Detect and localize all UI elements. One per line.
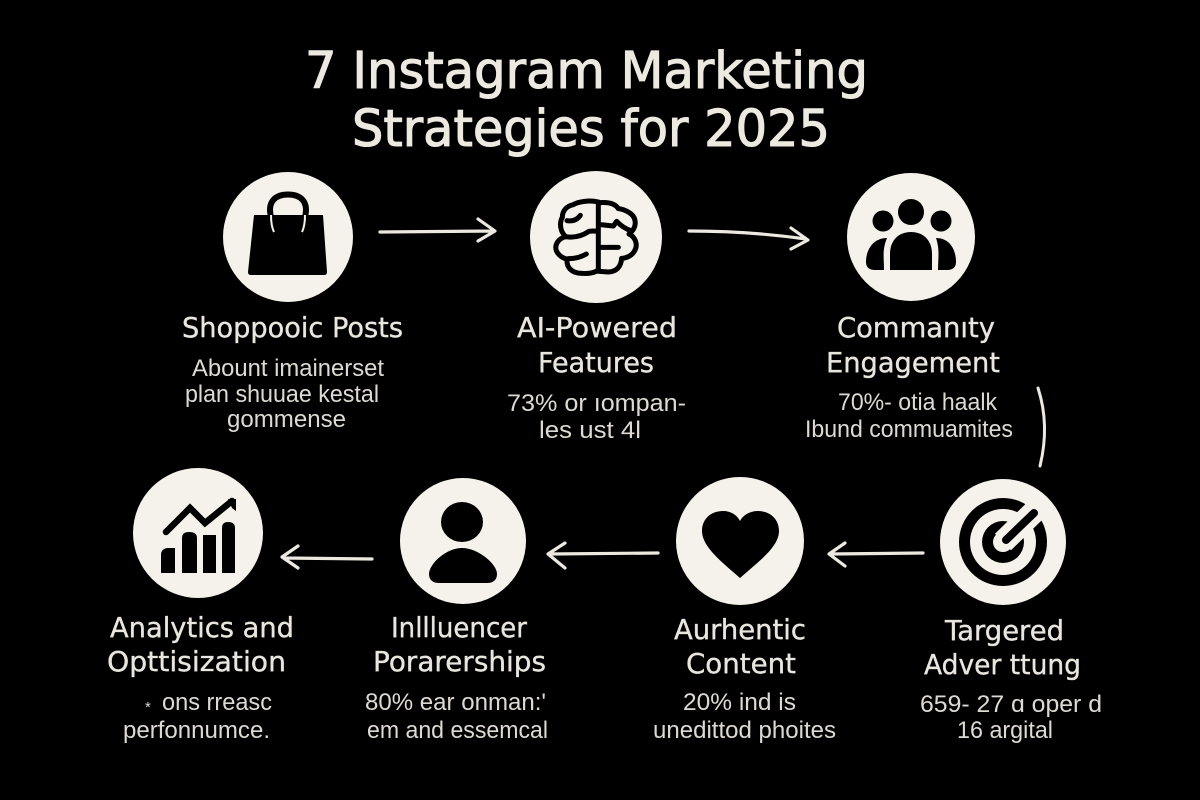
panel: community engagement [805, 173, 1013, 443]
heading: influencer partnerships: Porarerships [373, 645, 546, 678]
arrow: AI to community [689, 228, 808, 249]
description: community engagement [805, 389, 1013, 443]
description: influencer partnerships [365, 689, 548, 744]
heading: influencer partnerships [373, 611, 546, 678]
description: influencer partnerships: 80% ear onman:' [365, 689, 546, 716]
icon: bar chart with trend line [133, 468, 263, 598]
heading: influencer partnerships: Inllluencer [391, 611, 527, 644]
heading: analytics and optimization: Analytics and [110, 611, 294, 644]
description: AI-powered features: 73% or ıompan- [507, 390, 686, 417]
icon: shopping bag [223, 172, 353, 302]
panel: AI-powered features [507, 171, 686, 444]
description: authentic content: unedittod phoites [653, 717, 836, 744]
description: targeted advertising: 659- 27 ɑ oper d [920, 691, 1102, 718]
title: Strategies for 2025 [352, 100, 830, 159]
description: authentic content: 20% ind is [683, 689, 796, 716]
heading: shopping posts: Shoppooic Posts [182, 311, 403, 344]
arrow: influencer to analytics [282, 546, 372, 568]
heading: targeted advertising: Adver ttung [924, 648, 1081, 681]
heading: authentic content [674, 613, 806, 680]
panel: influencer partnerships [365, 478, 548, 744]
heading: community engagement: Commanıty [837, 311, 995, 344]
icon: group of people [847, 173, 975, 301]
panel: targeted advertising [920, 479, 1102, 744]
icon: person [400, 478, 526, 604]
icon: brain [530, 171, 662, 303]
heading: AI-powered features: AI-Powered [517, 311, 677, 344]
heading: AI-powered features: Features [538, 346, 654, 379]
heading: community engagement [826, 311, 1000, 379]
description: shopping posts: plan shuuae kestal [185, 381, 379, 408]
description: analytics and optimization: ons rreasc [162, 689, 272, 716]
description: analytics and optimization: perfonnumce. [123, 717, 270, 744]
panel: shopping posts [182, 172, 403, 433]
heading: targeted advertising: Targered [944, 614, 1064, 647]
description: AI-powered features: les ust 4l [539, 417, 641, 444]
description: analytics and optimization [123, 689, 272, 744]
title: 7 Instagram Marketing [305, 42, 868, 101]
description: community engagement: Ibund commuamites [805, 416, 1013, 443]
description: analytics and optimization: * [145, 699, 151, 716]
description: targeted advertising [920, 691, 1102, 744]
panel: authentic content [653, 477, 836, 744]
description: shopping posts: Abount imainerset [192, 355, 384, 382]
description: AI-powered features [507, 390, 686, 444]
heading: targeted advertising [924, 614, 1081, 681]
heading: authentic content: Content [686, 647, 796, 680]
arrow: community to targeted advertising [1038, 388, 1045, 466]
icon: target [940, 479, 1066, 605]
description: community engagement: 70%- otia haalk [838, 389, 998, 416]
icon: heart [676, 477, 804, 605]
arrow: authentic content to influencer [548, 543, 658, 568]
arrow: targeted advertising to authentic content [829, 543, 923, 566]
description: targeted advertising: 16 argital [957, 717, 1053, 744]
title [305, 42, 868, 159]
heading: authentic content: Aurhentic [674, 613, 806, 646]
heading: analytics and optimization [107, 611, 294, 678]
panel: analytics and optimization [107, 468, 294, 744]
heading: community engagement: Engagement [826, 346, 1000, 379]
heading: AI-powered features [517, 311, 677, 379]
description: influencer partnerships: em and essemcal [367, 717, 548, 744]
description: shopping posts [185, 355, 384, 433]
heading: analytics and optimization: Opttisization [107, 645, 286, 678]
arrow: shopping to AI [380, 219, 495, 241]
description: authentic content [653, 689, 836, 744]
description: shopping posts: gommense [227, 406, 346, 433]
